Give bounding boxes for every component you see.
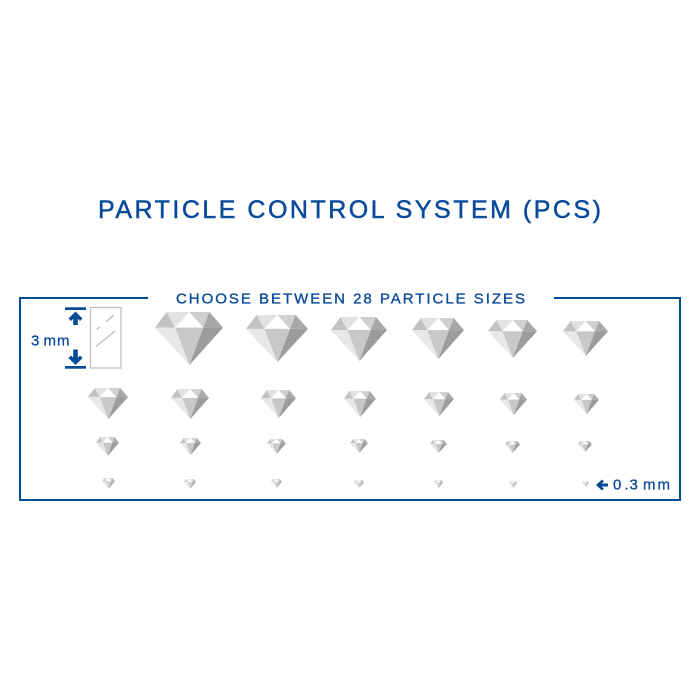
3mm scale: 3mm bbox=[31, 333, 70, 350]
diamonds row 1 bbox=[155, 312, 608, 365]
diamonds row 2 bbox=[88, 388, 599, 419]
3mm scale bbox=[31, 307, 86, 369]
panel frame bbox=[20, 298, 680, 500]
diamonds row 4 bbox=[102, 478, 589, 489]
panel heading: CHOOSE BETWEEN 28 PARTICLE SIZES bbox=[176, 290, 525, 308]
title: PARTICLE CONTROL SYSTEM (PCS) bbox=[98, 196, 601, 224]
0.3mm label: 0.3mm bbox=[613, 477, 670, 494]
diamonds row 3 bbox=[96, 437, 592, 456]
glass slide icon bbox=[90, 308, 121, 368]
